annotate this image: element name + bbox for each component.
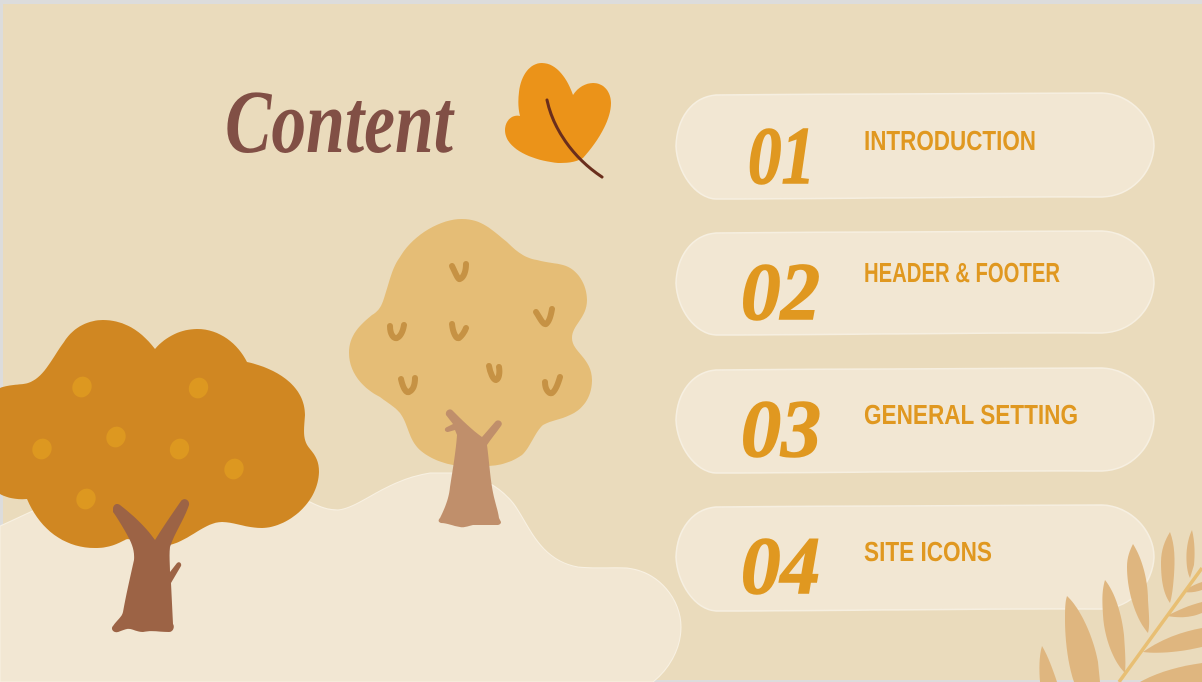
icon: autumn leaf	[505, 63, 611, 177]
list item 01	[676, 93, 1154, 201]
list item 02	[676, 231, 1154, 337]
pill	[676, 231, 1154, 335]
label: SITE ICONS	[864, 536, 992, 567]
label: INTRODUCTION	[864, 125, 1036, 156]
number: 01	[748, 110, 815, 201]
tree: dark orange	[0, 320, 319, 632]
number: 02	[741, 246, 820, 337]
list item 03	[676, 368, 1154, 474]
label: HEADER & FOOTER	[864, 257, 1060, 288]
number: 03	[741, 383, 821, 474]
crown	[0, 320, 319, 548]
leaf marks	[390, 264, 560, 393]
pill	[676, 368, 1154, 473]
trunk	[439, 409, 502, 527]
crown	[349, 219, 592, 466]
tree: light orange	[349, 219, 592, 527]
hill	[0, 473, 681, 682]
fruit dots	[29, 373, 247, 513]
trunk	[112, 499, 189, 632]
list item 04	[676, 505, 1154, 611]
pill	[676, 505, 1154, 611]
number: 04	[741, 520, 820, 611]
pill	[676, 93, 1154, 199]
label: GENERAL SETTING	[864, 399, 1078, 430]
title: Content	[225, 73, 455, 172]
icon: palm branch	[1039, 530, 1202, 682]
